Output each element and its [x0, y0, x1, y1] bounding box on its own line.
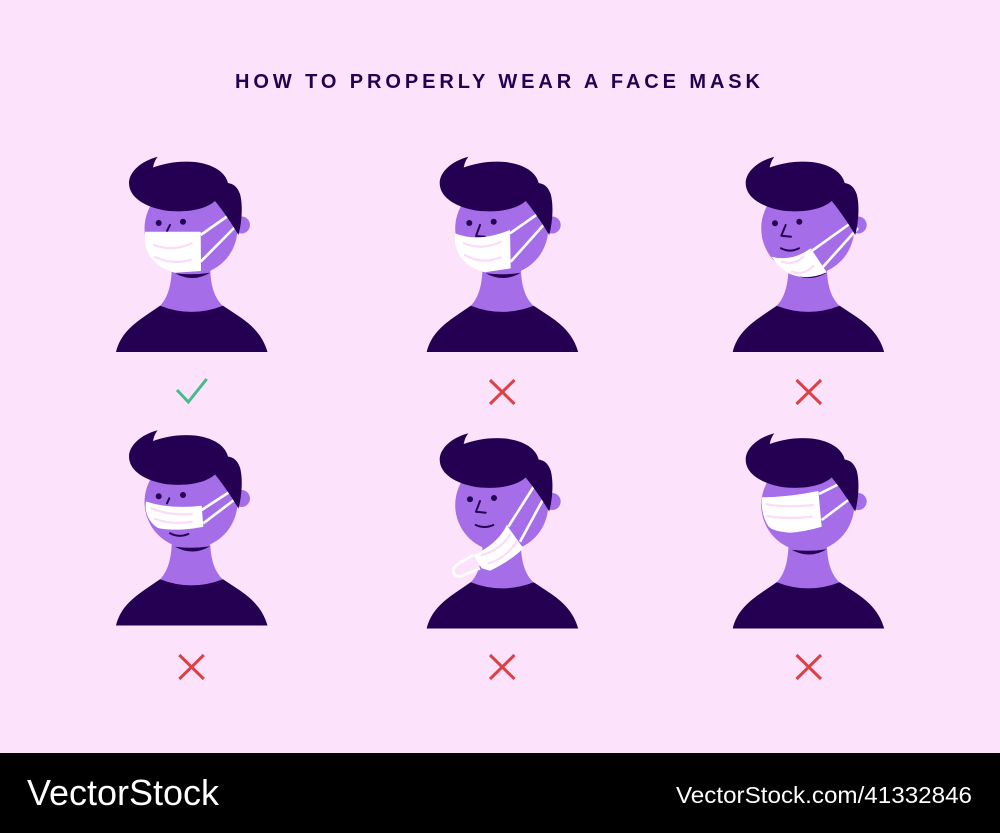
mask pleats	[152, 508, 192, 523]
title: HOW TO PROPERLY WEAR A FACE MASK	[235, 71, 761, 93]
icon: red cross	[490, 655, 514, 679]
mask pleats	[482, 535, 517, 563]
panel: mask under nose and mouth	[733, 157, 884, 352]
face mask	[473, 525, 523, 571]
icon: red cross	[490, 380, 514, 404]
panel: mask hanging from one ear	[427, 433, 578, 628]
loose strap loop	[453, 555, 480, 576]
face mask	[762, 491, 822, 533]
mask pleats	[154, 244, 192, 262]
panel: nose exposed	[427, 157, 578, 352]
mask straps	[510, 211, 548, 262]
hair	[129, 157, 242, 235]
mask straps	[819, 482, 855, 520]
mask straps	[811, 220, 858, 268]
mask straps	[202, 489, 238, 523]
icon: red cross	[796, 655, 821, 679]
hair	[746, 157, 858, 235]
panel: mask pulled over eyes	[733, 433, 884, 628]
panel: correct fit, nose and chin covered	[116, 157, 268, 352]
hair	[440, 157, 552, 235]
footer bar	[0, 753, 1000, 833]
mask pleats	[464, 242, 501, 261]
face mask	[455, 230, 511, 272]
face mask	[772, 248, 827, 277]
face mask	[145, 232, 201, 273]
icon: red cross	[796, 380, 821, 404]
hair	[129, 430, 242, 508]
mask straps	[201, 213, 238, 262]
icon: red cross	[179, 655, 204, 679]
mask pleats	[767, 504, 813, 518]
footer logo text: VectorStock	[27, 772, 220, 813]
mask straps	[508, 483, 546, 542]
footer url: VectorStock.com/41332846	[676, 782, 972, 808]
icon: green check	[177, 379, 207, 402]
mask pleats	[782, 257, 813, 273]
face mask	[146, 502, 203, 530]
hair	[440, 433, 552, 512]
hair	[746, 433, 858, 512]
panel: mask covers nose only	[116, 430, 268, 626]
